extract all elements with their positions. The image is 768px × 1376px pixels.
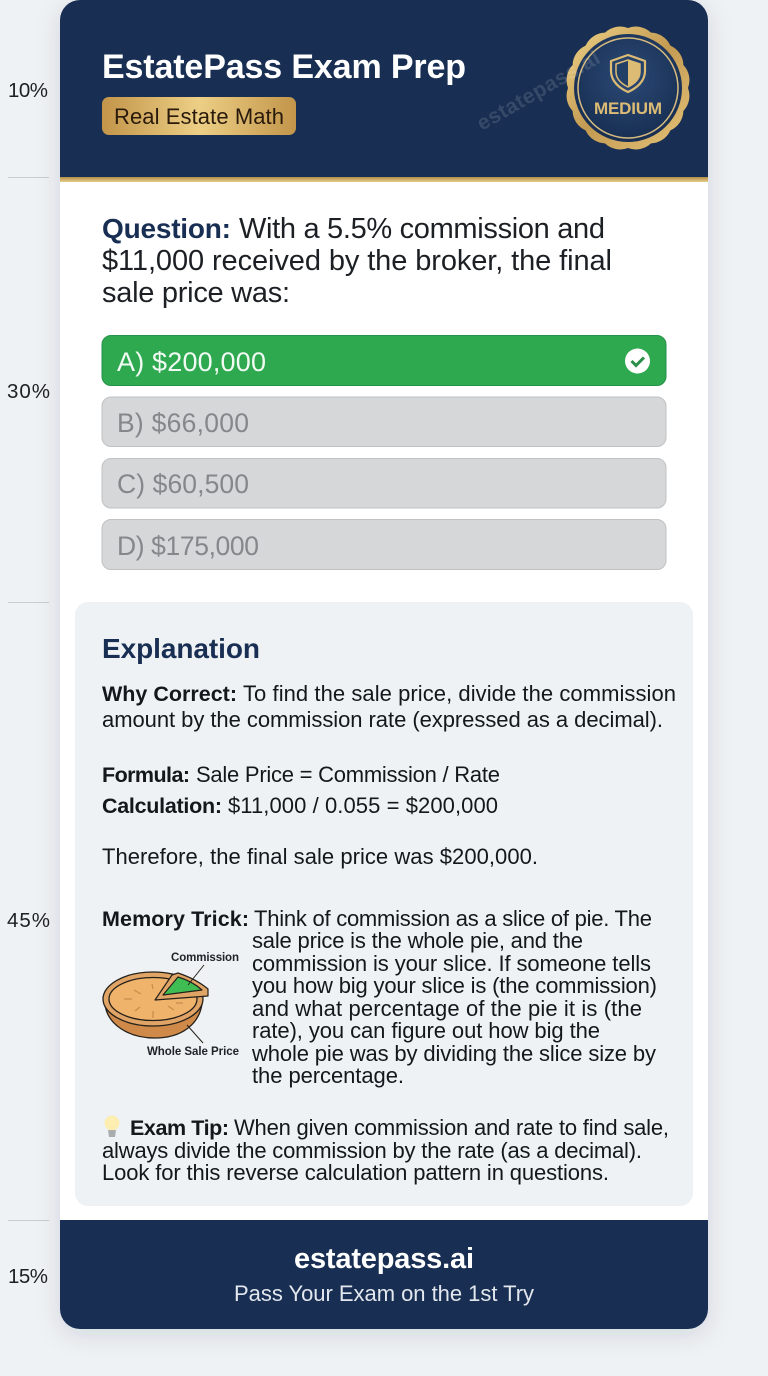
exam tip: When given commission and rate to find sale, bbox=[234, 1115, 669, 1140]
option A: correct: A) $200,000 bbox=[117, 347, 266, 377]
icon: shield bbox=[611, 55, 645, 92]
calculation: Calculation: bbox=[102, 794, 222, 818]
option C: C) $60,500 bbox=[117, 469, 249, 499]
formula: Formula: bbox=[102, 763, 190, 787]
label: whole sale price: Whole Sale Price bbox=[147, 1046, 239, 1058]
calculation: $11,000 / 0.055 = $200,000 bbox=[228, 793, 498, 818]
question text: With a 5.5% commission and bbox=[239, 213, 605, 245]
difficulty badge: MEDIUM bbox=[594, 99, 662, 118]
memory trick: sale price is the whole pie, and the bbox=[252, 928, 583, 953]
label: 10%: 10% bbox=[8, 79, 48, 102]
watermark: estatepass.ai bbox=[473, 46, 604, 135]
option A: correct bbox=[102, 336, 666, 386]
calculation bbox=[102, 793, 498, 818]
memory trick: and what percentage of the pie it is (the bbox=[252, 996, 642, 1021]
option B bbox=[102, 397, 666, 446]
formula: Sale Price = Commission / Rate bbox=[196, 762, 500, 787]
gold divider bbox=[60, 177, 708, 182]
exam tip: Exam Tip: bbox=[130, 1116, 229, 1140]
option D bbox=[102, 520, 666, 570]
label: 15%: 15% bbox=[8, 1265, 48, 1288]
exam tip: always divide the commission by the rate (as a decimal). bbox=[102, 1138, 642, 1163]
why correct: Why Correct: bbox=[102, 682, 237, 706]
why correct bbox=[102, 681, 676, 732]
icon: light bulb bbox=[104, 1116, 120, 1137]
memory trick: commission is your slice. If someone tells bbox=[252, 951, 651, 976]
brand name: estatepass.ai bbox=[294, 1243, 474, 1275]
why correct: amount by the commission rate (expressed as a decimal). bbox=[102, 707, 663, 732]
exam tip: Look for this reverse calculation pattern in questions. bbox=[102, 1160, 609, 1185]
memory trick: rate), you can figure out how big the bbox=[252, 1018, 600, 1043]
icon: check bbox=[625, 348, 650, 374]
question text: Question: bbox=[102, 213, 231, 244]
panel: header bbox=[60, 0, 708, 182]
memory trick bbox=[102, 906, 657, 1088]
side labels: section percentages bbox=[7, 79, 50, 1288]
tagline: Pass Your Exam on the 1st Try bbox=[234, 1281, 534, 1306]
option D: D) $175,000 bbox=[117, 531, 259, 561]
memory trick: whole pie was by dividing the slice size by bbox=[251, 1041, 656, 1066]
why correct: To find the sale price, divide the commission bbox=[243, 681, 676, 706]
panel: question bbox=[102, 213, 666, 570]
memory trick: you how big your slice is (the commission) bbox=[252, 973, 657, 998]
pointer: commission bbox=[188, 965, 204, 985]
conclusion: Therefore, the final sale price was $200,000. bbox=[102, 844, 538, 869]
question text: sale price was: bbox=[102, 277, 290, 309]
icon: pie diagram bbox=[103, 952, 239, 1058]
pointer: whole sale price bbox=[187, 1025, 203, 1043]
option C bbox=[102, 458, 666, 508]
heading: Explanation bbox=[102, 633, 260, 664]
slice crust bbox=[155, 973, 208, 1000]
title: EstatePass Exam Prep bbox=[102, 48, 466, 86]
category pill bbox=[102, 97, 296, 135]
label: 45%: 45% bbox=[7, 909, 50, 932]
memory trick: the percentage. bbox=[252, 1063, 404, 1088]
commission slice bbox=[163, 977, 202, 995]
exam tip bbox=[102, 1115, 669, 1185]
memory trick: Think of commission as a slice of pie. The bbox=[254, 906, 652, 931]
label: 30%: 30% bbox=[7, 380, 50, 403]
category pill: Real Estate Math bbox=[114, 104, 284, 129]
panel: footer bbox=[60, 1220, 708, 1329]
question text bbox=[102, 213, 612, 309]
difficulty badge bbox=[567, 27, 689, 149]
option B: B) $66,000 bbox=[117, 408, 249, 438]
panel: explanation bbox=[75, 602, 693, 1206]
question text: $11,000 received by the broker, the final bbox=[102, 245, 612, 277]
memory trick: Memory Trick: bbox=[102, 907, 249, 931]
label: commission: Commission bbox=[171, 952, 239, 964]
